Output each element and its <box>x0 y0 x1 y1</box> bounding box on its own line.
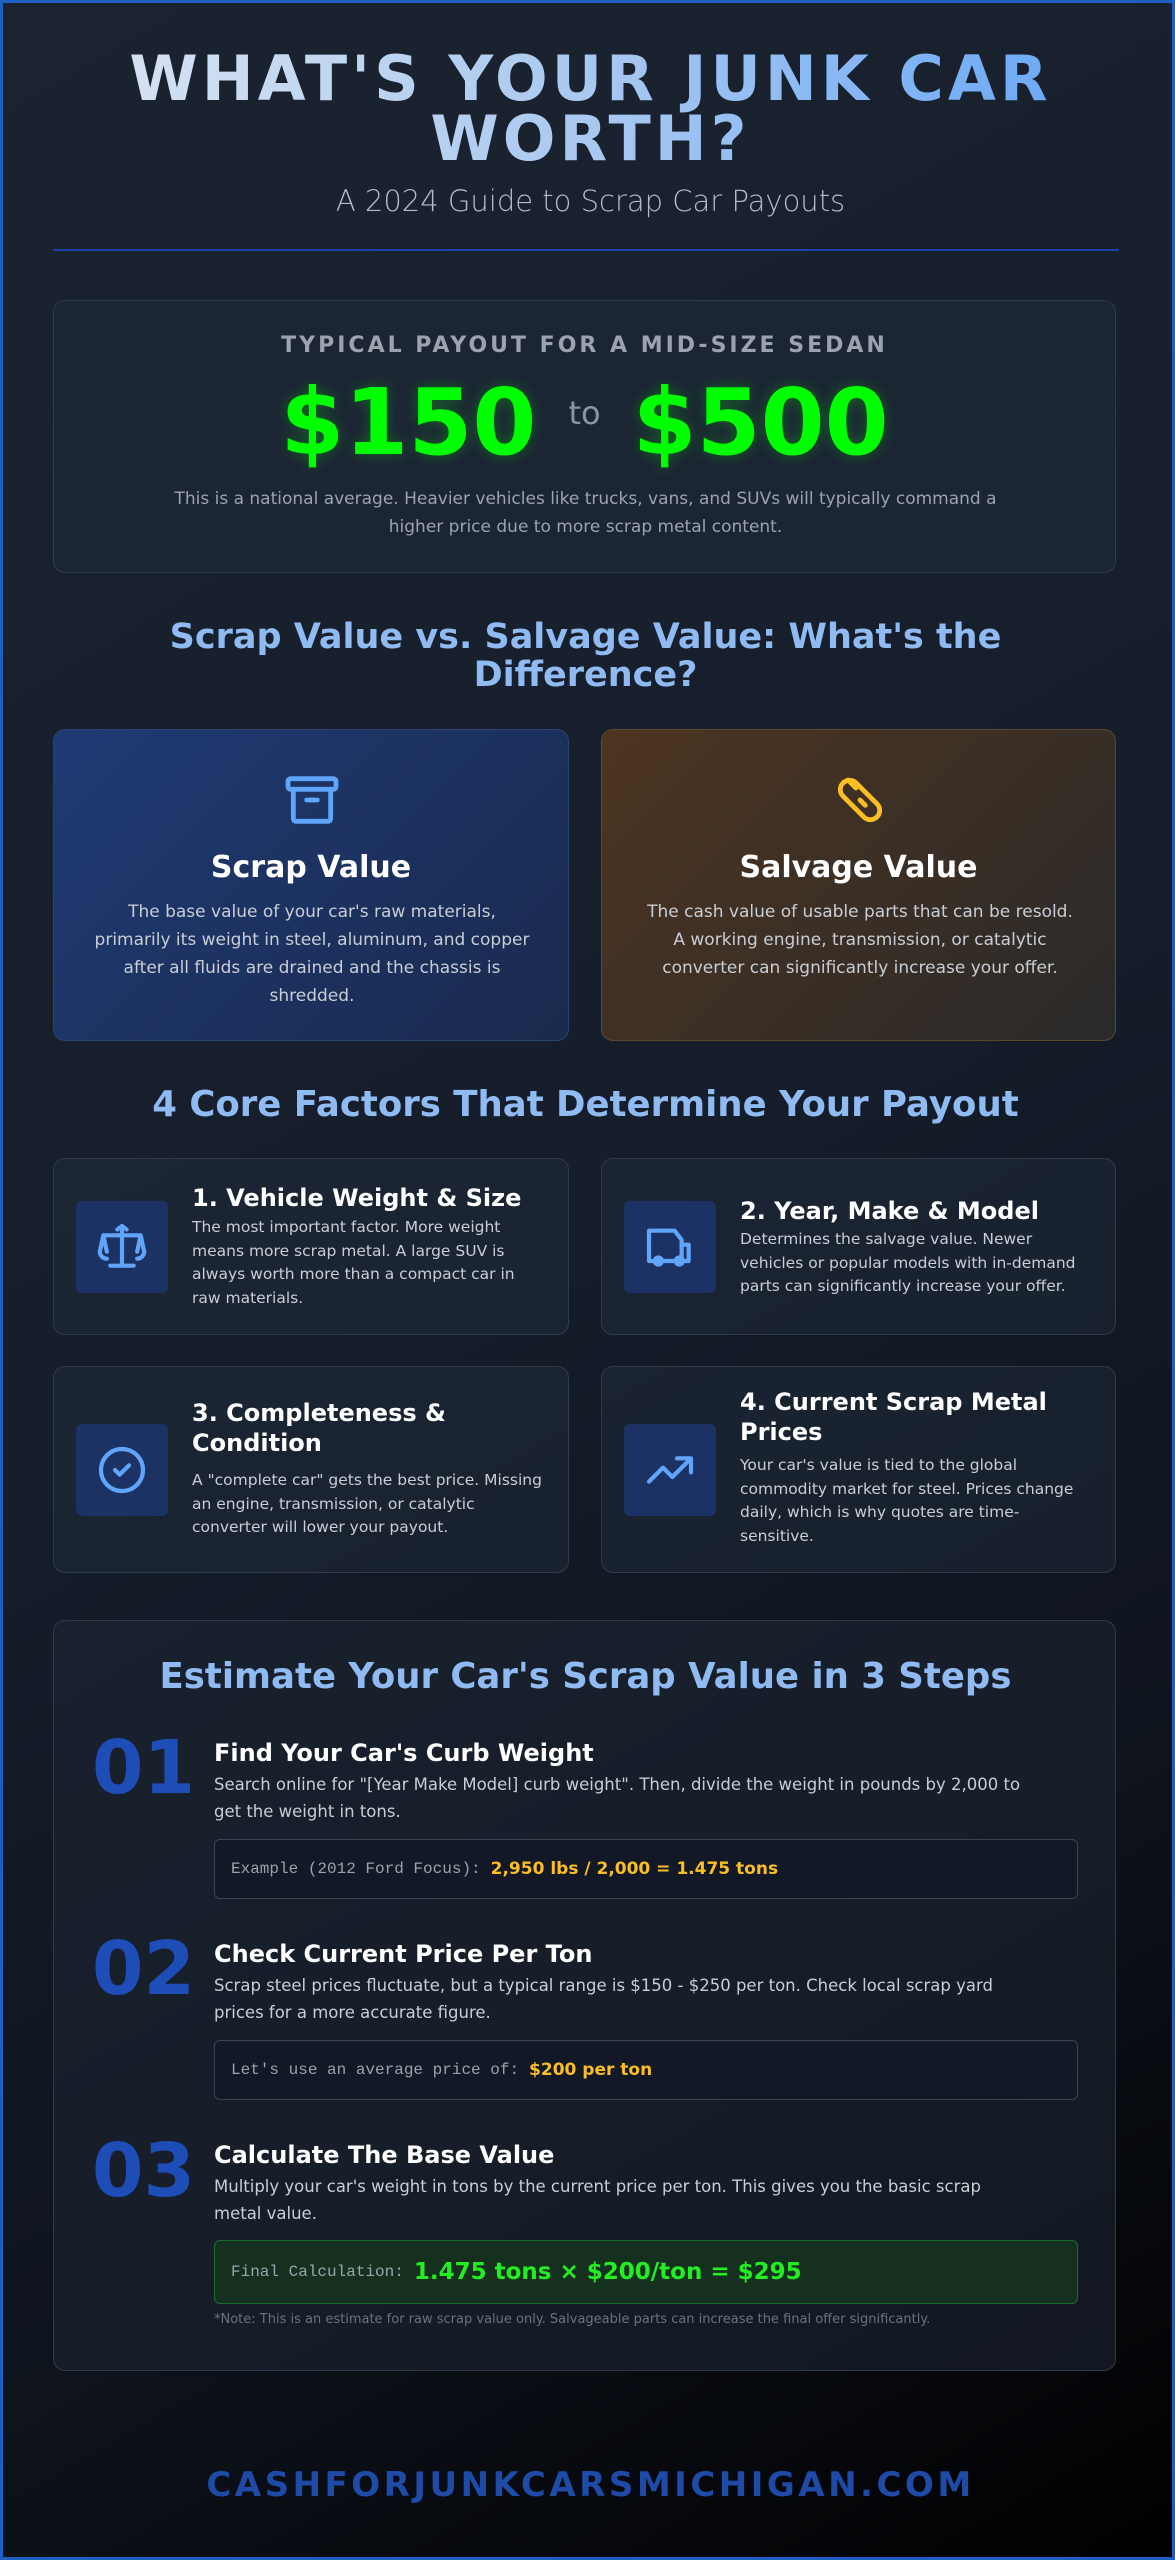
payout range: $150 to $500 <box>280 369 889 476</box>
factor 1: 1. Vehicle Weight & Size <box>192 1184 521 1212</box>
factor 4 <box>601 1366 1116 1573</box>
factor 3: A "complete car" gets the best price. Missing an engine, transmission, or catalytic converter will lower your payout. <box>192 1471 542 1536</box>
factor 4: Prices <box>740 1418 822 1446</box>
example box: Example (2012 Ford Focus): <box>231 1860 481 1878</box>
heading: steps: Estimate Your Car's Scrap Value in 3 Steps <box>160 1656 1011 1697</box>
example box: 2,950 lbs / 2,000 = 1.475 tons <box>491 1859 778 1879</box>
icon: archive box <box>286 776 338 824</box>
step 2: Check Current Price Per Ton <box>214 1940 592 1968</box>
scrap text: The base value of your car's raw materials, primarily its weight in steel, aluminum, and copper after all fluids are drained and the chassis is shredded. <box>95 902 529 1006</box>
final calculation box: Final Calculation: <box>231 2263 404 2281</box>
title: WORTH? <box>430 102 751 175</box>
factor 3 <box>53 1366 569 1573</box>
final calculation box: 1.475 tons × $200/ton = $295 <box>414 2259 802 2285</box>
factor 2: Determines the salvage value. Newer vehicles or popular models with in-demand parts can significantly increase your offer. <box>740 1230 1076 1295</box>
note: *Note: This is an estimate for raw scrap value only. Salvageable parts can increase the final offer significantly. <box>214 2312 930 2327</box>
payout label: TYPICAL PAYOUT FOR A MID-SIZE SEDAN <box>281 333 888 358</box>
step 2: 02 <box>92 1926 195 2012</box>
icon: check circle <box>76 1424 168 1516</box>
step 1: 01 <box>92 1725 195 1811</box>
footer: CASHFORJUNKCARSMICHIGAN.COM <box>206 2465 975 2505</box>
factor 2 <box>601 1158 1116 1335</box>
icon: wrench <box>838 778 882 822</box>
icon: truck <box>624 1201 716 1293</box>
step 1: Search online for "[Year Make Model] curb weight". Then, divide the weight in pounds by 2,000 to get the weight in tons. <box>214 1775 1020 1821</box>
factor 3: Condition <box>192 1429 322 1457</box>
price box: Let's use an average price of: <box>231 2061 519 2079</box>
factor 2: 2. Year, Make & Model <box>740 1197 1039 1225</box>
panel: 3 steps <box>53 1620 1116 2371</box>
factor 4: Your car's value is tied to the global commodity market for steel. Prices change daily, which is why quotes are time-sensitive. <box>740 1456 1073 1544</box>
step 3: 03 <box>92 2128 195 2214</box>
step 2 <box>92 1926 1078 2100</box>
salvage title: Salvage Value <box>739 850 978 885</box>
final calculation box <box>214 2240 1078 2304</box>
step 2: Scrap steel prices fluctuate, but a typical range is $150 - $250 per ton. Check local scrap yard prices for a more accurate figure. <box>214 1976 993 2022</box>
price box <box>214 2040 1078 2100</box>
scrap title: Scrap Value <box>211 850 411 885</box>
factor 1: The most important factor. More weight means more scrap metal. A large SUV is always worth more than a compact car in raw materials. <box>192 1218 515 1306</box>
panel: salvage value <box>601 729 1116 1041</box>
subtitle: A 2024 Guide to Scrap Car Payouts <box>336 184 845 218</box>
salvage text: The cash value of usable parts that can be resold. A working engine, transmission, or catalytic converter can significantly increase your offer. <box>647 902 1073 978</box>
step 1 <box>92 1725 1078 1899</box>
payout note: This is a national average. Heavier vehicles like trucks, vans, and SUVs will typically command a higher price due to more scrap metal content. <box>174 489 997 537</box>
panel: scrap value <box>53 729 569 1041</box>
step 3: Multiply your car's weight in tons by the current price per ton. This gives you the basic scrap metal value. <box>214 2177 981 2223</box>
title <box>43 49 1138 169</box>
panel: typical payout <box>53 300 1116 573</box>
step 3: Calculate The Base Value <box>214 2141 554 2169</box>
price box: $200 per ton <box>529 2060 652 2080</box>
step 1: Find Your Car's Curb Weight <box>214 1739 594 1767</box>
factor 1 <box>53 1158 569 1335</box>
factor 3: 3. Completeness & <box>192 1399 446 1427</box>
icon: scale <box>76 1201 168 1293</box>
step 3 <box>92 2128 1078 2327</box>
heading: core factors: 4 Core Factors That Determine Your Payout <box>152 1084 1019 1125</box>
heading: scrap vs salvage: Scrap Value vs. Salvage Value: What's the Difference? <box>170 617 1001 695</box>
example box <box>214 1839 1078 1899</box>
factor 4: 4. Current Scrap Metal <box>740 1388 1047 1416</box>
icon: trending up <box>624 1424 716 1516</box>
title: WHAT'S YOUR JUNK CAR <box>129 42 1052 115</box>
